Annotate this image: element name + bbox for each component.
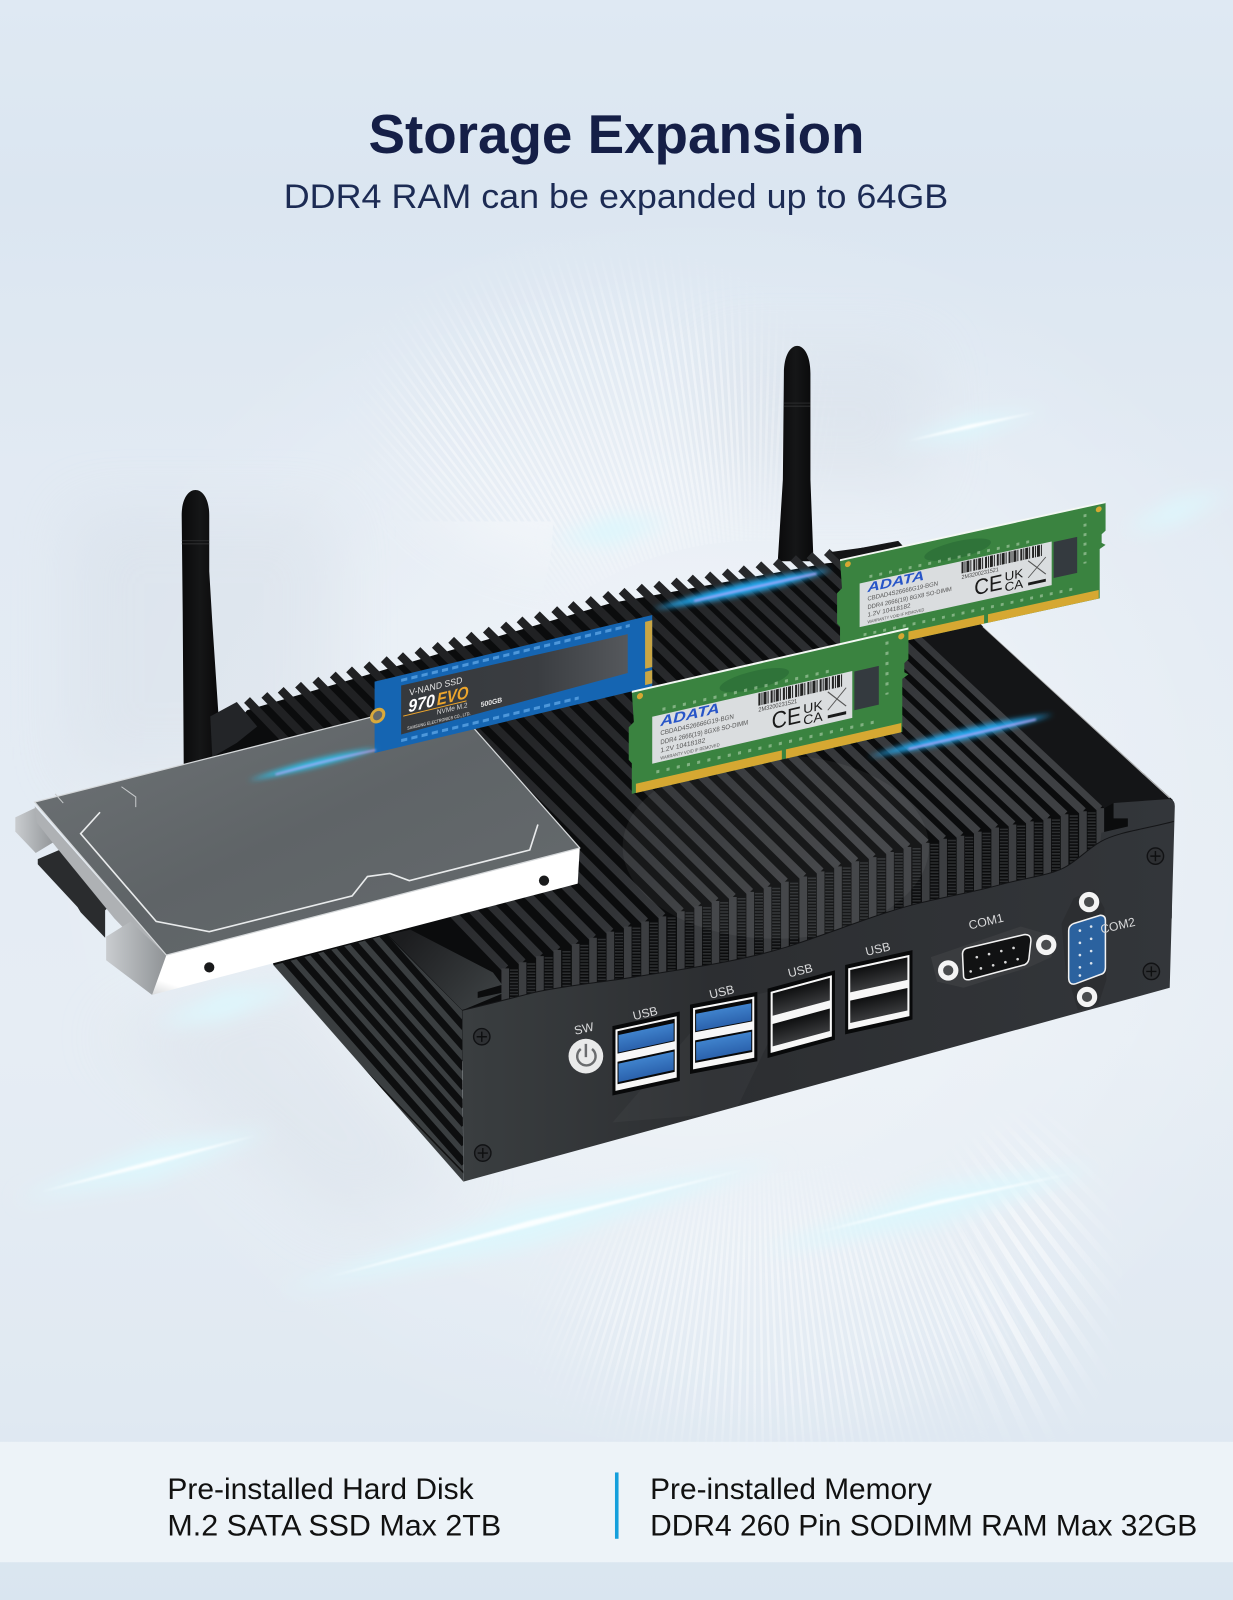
right antenna — [778, 346, 813, 561]
screw: front left bottom — [475, 1145, 491, 1161]
ram gold contacts — [844, 590, 1099, 654]
ssd orange rule — [403, 700, 466, 717]
subtitle: DDR4 RAM can be expanded up to 64GB — [284, 178, 948, 216]
text: memory line 1: Pre-installed Memory — [650, 1473, 932, 1506]
back left corner block — [210, 702, 257, 757]
hard disk drive — [15, 698, 580, 995]
hdd screw hole right — [539, 876, 549, 886]
text: memory line 2: DDR4 260 Pin SODIMM RAM Max 32GB — [650, 1510, 1197, 1543]
ram chip — [1054, 537, 1077, 578]
light streak: rear ram — [653, 569, 832, 609]
light streak: hard disk — [248, 748, 378, 781]
ram sticker — [860, 541, 1052, 627]
ssd text: manufacturer: SAMSUNG ELECTRONICS CO., LTD. — [407, 711, 471, 731]
logo: ADATA: ADATA — [659, 701, 720, 730]
hdd lid outline — [81, 812, 538, 932]
label: SW: SW — [573, 1020, 596, 1038]
ram traces — [924, 534, 991, 566]
usb port group 1 (blue) — [612, 1012, 680, 1096]
left antenna — [182, 490, 218, 765]
sticker text: DDR4 2666(19) 8GX8 SO-DIMM — [867, 586, 952, 611]
title: Storage Expansion — [368, 103, 865, 165]
CE mark: CE — [974, 570, 1003, 600]
CA mark: CA — [1005, 577, 1024, 594]
fin end serrations — [514, 812, 1092, 1041]
power button — [569, 1039, 603, 1073]
streak cores — [41, 412, 1072, 1278]
sticker text: DDR4 2666(19) 8GX8 SO-DIMM — [660, 719, 749, 746]
fin sheen — [623, 755, 929, 939]
weee bar — [828, 711, 846, 718]
ram sticker — [652, 671, 852, 764]
ssd circuit details — [401, 626, 630, 741]
label: COM2: COM2 — [1099, 915, 1137, 936]
radial hatch rings — [420, 307, 976, 1416]
sticker text: 1.2V 10418182 — [867, 602, 911, 619]
CE mark: CE — [772, 702, 801, 735]
ram components — [864, 514, 1085, 635]
weee cross — [1028, 557, 1046, 578]
screw: front left top — [474, 1029, 490, 1045]
usb port group 2 (blue) — [690, 992, 757, 1074]
hdd screw hole left — [204, 962, 214, 972]
mini pc chassis — [210, 541, 1175, 1194]
ram components — [656, 642, 887, 772]
background — [0, 285, 1233, 1440]
weee bar — [1028, 579, 1046, 585]
ram pcb — [629, 629, 908, 795]
ram mount hole — [637, 692, 643, 700]
bottom info band — [0, 1442, 1233, 1562]
hdd connector — [38, 850, 114, 938]
ssd label — [401, 631, 628, 734]
ssd pcb — [375, 615, 652, 753]
hdd white side — [152, 848, 580, 995]
text: hard disk line 1: Pre-installed Hard Disk — [167, 1473, 474, 1506]
chassis side face — [274, 935, 464, 1182]
screw: front right top — [1147, 848, 1164, 864]
front plate — [462, 799, 1175, 1182]
sticker text: 1.2V 10418182 — [660, 737, 706, 755]
usb port group 3 (black) — [768, 970, 835, 1058]
sticker text: CBDAD4S26666G19-BGN — [660, 714, 734, 737]
label: USB 3: USB — [787, 961, 814, 980]
barcode — [758, 680, 844, 700]
m.2 ssd — [372, 615, 652, 754]
rear ram module — [837, 502, 1106, 656]
ssd text: EVO: EVO — [437, 682, 469, 709]
ssd text: 500GB: 500GB — [481, 695, 502, 709]
front plate sheen — [612, 985, 796, 1122]
ssd text: NVMe M.2: NVMe M.2 — [437, 700, 467, 717]
hdd lid corner mark — [55, 787, 136, 807]
ssd text: 970: 970 — [408, 690, 435, 716]
chassis top base — [211, 556, 1173, 1061]
label: USB 2: USB — [708, 982, 736, 1002]
sticker text: CBDAD4S26666G19-BGN — [867, 580, 938, 603]
ram chip — [854, 666, 879, 710]
CA mark: CA — [803, 709, 823, 728]
barcode — [962, 550, 1044, 568]
serial number: 2M3200231521 — [758, 698, 798, 714]
chassis right edge highlight — [983, 627, 1170, 798]
band background — [0, 1442, 1233, 1562]
cyan streaks — [15, 410, 1233, 1293]
fin end faces — [505, 808, 1100, 1040]
back right corner block — [840, 541, 919, 577]
light streak: front ram — [868, 714, 1053, 757]
sticker text — [867, 577, 952, 624]
ram corner hole — [898, 633, 904, 640]
front ram module — [629, 629, 908, 795]
hdd rear tab — [15, 808, 59, 853]
ssd text: V-NAND SSD: V-NAND SSD — [409, 675, 463, 698]
ram corner hole — [1096, 506, 1102, 513]
logo: ADATA: ADATA — [866, 568, 924, 595]
ram top edge — [632, 629, 908, 692]
weee cross — [828, 688, 846, 710]
ram top edge — [840, 502, 1106, 560]
usb port group 4 (black) — [845, 950, 913, 1034]
ssd gold contacts — [645, 620, 652, 669]
hdd front tab — [106, 921, 170, 995]
right solid edge of chassis top — [831, 543, 1173, 808]
text: hard disk line 2: M.2 SATA SSD Max 2TB — [167, 1510, 501, 1543]
COM1 connector — [931, 927, 1056, 988]
soft grey shadows — [71, 347, 929, 1224]
ram traces — [720, 663, 789, 697]
ssd gold contacts lower — [645, 670, 652, 685]
hdd top face — [35, 698, 580, 955]
screw: front right bottom — [1143, 963, 1160, 980]
sticker text: WARRANTY VOID IF REMOVED — [867, 607, 924, 624]
sticker text: WARRANTY VOID IF REMOVED — [660, 742, 720, 761]
chassis side rib — [388, 930, 506, 1010]
COM2 connector — [1062, 890, 1106, 1010]
UK mark: UK — [803, 698, 823, 717]
serial number: 2M3200231521 — [962, 567, 999, 581]
plate seam line — [462, 821, 1174, 1010]
ram gold contacts — [636, 723, 901, 793]
UK mark: UK — [1005, 566, 1024, 584]
hdd side rail — [35, 806, 166, 969]
ram pcb — [837, 502, 1106, 656]
label: USB 1: USB — [631, 1004, 659, 1023]
heat sink fins — [247, 552, 1100, 968]
label: USB 4: USB — [864, 940, 892, 959]
sticker text — [660, 710, 749, 761]
divider — [615, 1472, 619, 1539]
label: COM1: COM1 — [967, 911, 1005, 932]
ssd mounting notch — [372, 708, 384, 723]
ram mount hole — [845, 561, 851, 568]
